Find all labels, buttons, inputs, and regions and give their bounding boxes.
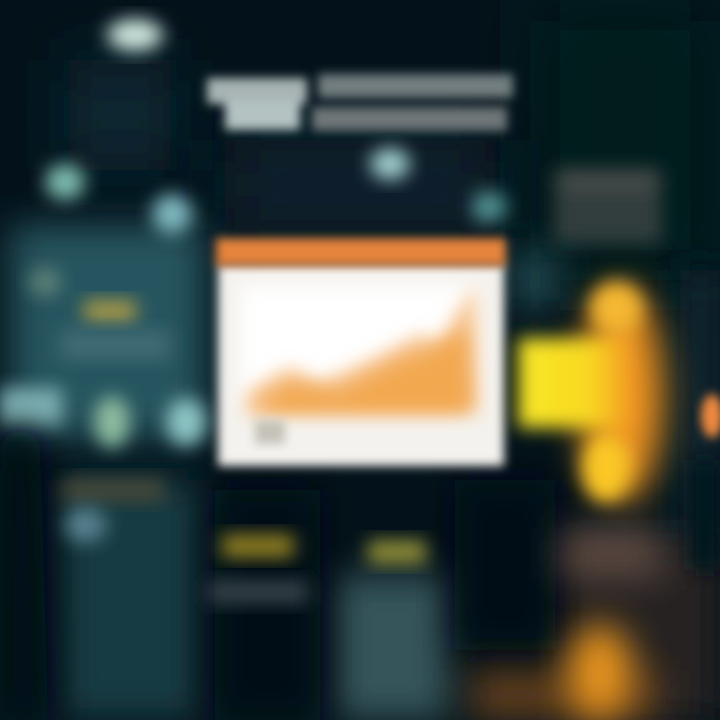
arrow: yellow — [518, 282, 664, 503]
silhouette: centre figures — [215, 480, 555, 720]
area chart highlights — [250, 330, 470, 412]
icon: lower left — [63, 507, 107, 543]
silhouette: left figure — [0, 425, 48, 720]
icon: right teal blob — [471, 191, 507, 223]
title block — [207, 74, 513, 131]
text: right lower panel — [562, 528, 662, 578]
icon: small left — [29, 268, 61, 296]
reflection: orange — [470, 624, 660, 720]
panel: chart card — [216, 238, 506, 466]
icon: pale right row — [166, 398, 206, 446]
label: lower left — [60, 478, 165, 502]
icon: orange right edge — [701, 394, 720, 438]
icon: upper right — [152, 194, 192, 234]
top light blob — [107, 19, 163, 51]
card header — [216, 238, 506, 266]
text block: left grey — [60, 330, 170, 360]
panel: right grey text — [554, 168, 662, 244]
text: centre left grey — [208, 580, 308, 604]
label: centre right yellow — [368, 540, 426, 564]
silhouette: right figure — [690, 460, 720, 570]
icon: pale middle row — [94, 396, 130, 448]
label: centre left yellow — [222, 534, 294, 558]
icon: pale left row — [0, 388, 62, 426]
icon: top centre blob — [370, 148, 410, 180]
chart caption — [255, 420, 285, 444]
area chart — [245, 285, 478, 412]
card body — [218, 264, 504, 466]
left panel icons and labels — [0, 164, 206, 543]
label: left yellow — [84, 300, 136, 322]
icon: upper left — [45, 164, 85, 200]
